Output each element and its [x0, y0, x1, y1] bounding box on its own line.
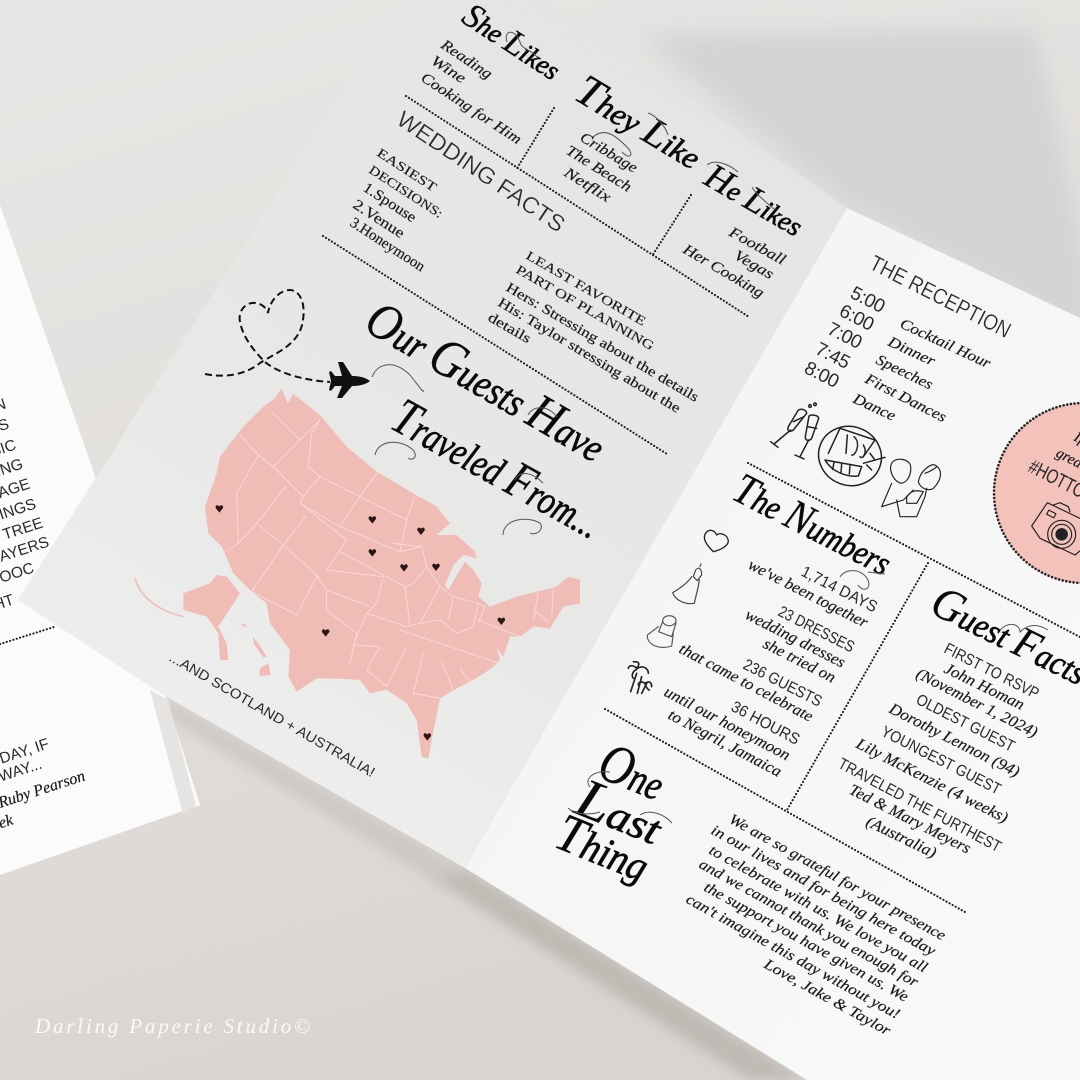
text block: easiest decisions: DECISIONS:: [366, 162, 446, 221]
dotted dividers: right page: [605, 463, 1080, 912]
text block: guest facts: Lily McKenzie (4 weeks): [852, 735, 1011, 827]
text block: guest facts: Ted & Mary Meyers: [846, 781, 973, 857]
text block: guest facts: John Homan: [941, 660, 1027, 714]
text block: the numbers facts: she tried on: [760, 635, 838, 686]
text block: the numbers facts: wedding dresses: [742, 606, 848, 672]
text block: least favorite part of planning: His: Taylor stressing about the: [495, 296, 683, 417]
heading: They Like: They Like: [567, 65, 712, 179]
list: reception times: 5:00: [847, 283, 888, 318]
text block: thank you letter: to celebrate with us. We love you all: [706, 843, 930, 976]
list: reception times: [801, 283, 888, 393]
icon: heart outline: [704, 530, 728, 552]
map: Hawaii: [240, 623, 271, 676]
text block: least favorite part of planning: [485, 248, 701, 417]
list: reception events: Dinner: [884, 334, 938, 370]
text block: the numbers facts: to Negril, Jamaica: [665, 707, 784, 781]
map: Aleutian islands: [135, 578, 183, 617]
map: contiguous states: [205, 388, 580, 758]
list: reception events: [849, 316, 993, 426]
text block: thank you letter: We are so grateful for your presence: [726, 812, 948, 944]
icon: palm trees: [628, 662, 652, 693]
text block: thank you letter: the support you have given us. We: [701, 880, 911, 1006]
list: she likes: Wine: [428, 53, 469, 87]
text block: thank you letter: [683, 812, 948, 1039]
list: reception times: 7:45: [812, 339, 853, 374]
map: hearts marking guest origins: [216, 505, 505, 741]
text block: least favorite part of planning: PART OF PLANNING: [514, 262, 657, 353]
text block: guest facts: (Australia): [863, 813, 939, 862]
text block: the numbers facts: 36 HOURS: [728, 699, 802, 749]
text block: easiest decisions: 2.Venue: [350, 197, 408, 242]
text block: the numbers facts: 236 GUESTS: [740, 656, 825, 711]
callout: pink hashtag circle: [994, 403, 1080, 583]
list: reception events: First Dances: [861, 371, 949, 426]
text block: guest facts: OLDEST GUEST: [913, 691, 1017, 756]
icon: dancing couple: [882, 459, 940, 517]
list: they like: Netflix: [560, 164, 614, 206]
icon: plate with place setting: [810, 418, 890, 494]
text block: guest facts: Dorothy Lennon (94): [885, 700, 1022, 781]
map: state borders: [225, 412, 553, 698]
heading: The Numbers: The Numbers: [725, 463, 901, 585]
back booklet list text: [0, 396, 87, 832]
text block: easiest decisions: [347, 145, 446, 275]
list: they like: Cribbage: [577, 130, 640, 177]
text block: guest facts: YOUNGEST GUEST: [878, 723, 1004, 799]
text block: thank you letter: Love, Jake & Taylor: [760, 956, 893, 1039]
dotted dividers: left page: [323, 96, 749, 454]
text block: the numbers facts: until our honeymoon: [661, 684, 793, 764]
text block: guest facts: [835, 640, 1042, 862]
callout text: If / great / hashtag: [1025, 429, 1080, 514]
icon: champagne glasses: [771, 403, 819, 459]
map: Alaska: [183, 575, 240, 660]
text block: the numbers facts: [661, 556, 880, 781]
text block: easiest decisions: 1.Spouse: [360, 180, 419, 226]
text block: thank you letter: can't imagine this day without you!: [683, 892, 902, 1023]
list: she likes: Reading: [437, 36, 495, 83]
map: pink USA with state lines: [135, 388, 580, 758]
text block: thank you letter: and we cannot thank you enough for: [696, 857, 921, 991]
list: he likes: [679, 224, 788, 302]
text block: easiest decisions: 3.Honeymoon: [347, 215, 428, 275]
list: he likes: Vegas: [731, 248, 776, 283]
list: he likes: Football: [725, 224, 788, 269]
text block: least favorite part of planning: Hers: Stressing about the details: [503, 281, 701, 406]
heading: Traveled From: Traveled From...: [382, 388, 613, 550]
list: reception events: Dance: [849, 391, 898, 425]
heading: He Likes: He Likes: [697, 155, 812, 244]
heading: Our Guests Have: Our Guests Have: [356, 287, 618, 473]
icon: dashed heart flight path: [205, 290, 330, 382]
list: he likes: Her Cooking: [679, 241, 767, 302]
list: reception events: Cocktail Hour: [897, 316, 993, 372]
heading: One Last Thing: Thing: [548, 801, 659, 893]
text block: the numbers facts: 1,714 DAYS: [798, 563, 880, 616]
heading: The Reception: THE RECEPTION: [866, 250, 1015, 343]
list: reception events: Speeches: [873, 352, 935, 393]
panel: back booklet on the left: [0, 205, 200, 875]
list: she likes: Cooking for Him: [418, 70, 524, 148]
list: reception times: 7:00: [824, 319, 865, 354]
panel: right inner page: [465, 208, 1080, 1080]
text block: guest facts: (November 1, 2024): [913, 665, 1040, 741]
icon: airplane: [329, 362, 370, 398]
text block: the numbers facts: 23 DRESSES: [775, 603, 857, 656]
icons: numbers column: [628, 530, 728, 693]
text block: guest facts: TRAVELED THE FURTHEST: [835, 756, 1004, 856]
text block: easiest decisions: EASIEST: [374, 145, 440, 195]
icon: camera: [1032, 503, 1080, 555]
list: they like: The Beach: [563, 143, 634, 196]
heading: One Last Thing: [548, 731, 675, 893]
text block: the numbers facts: we've been together: [745, 556, 871, 632]
watermark: Darling Paperie Studio©: [34, 1014, 310, 1038]
list: reception times: 8:00: [801, 358, 842, 393]
list: she likes: [418, 36, 524, 148]
text block: guest facts: FIRST TO RSVP: [941, 640, 1042, 703]
icon: wedding cake: [647, 616, 676, 647]
panel: left inner page: [18, 0, 847, 868]
list: they like: [560, 130, 640, 206]
heading: One Last Thing: Last: [566, 766, 673, 858]
list: reception times: 6:00: [836, 301, 877, 336]
icons: reception drawings: [771, 403, 940, 517]
text block: least favorite part of planning: LEAST FAVORITE: [524, 248, 649, 329]
text block: thank you letter: in our lives and for being here today: [708, 823, 938, 960]
icon: dress: [673, 564, 702, 604]
text block: the numbers facts: that came to celebrate: [676, 641, 816, 725]
text block: least favorite part of planning: details: [485, 310, 533, 347]
heading: One Last Thing: One: [590, 731, 675, 813]
heading: Wedding Facts: WEDDING FACTS: [392, 106, 570, 237]
caption: and Scotland + Australia: ...AND SCOTLAND + AUSTRALIA!: [166, 649, 378, 780]
